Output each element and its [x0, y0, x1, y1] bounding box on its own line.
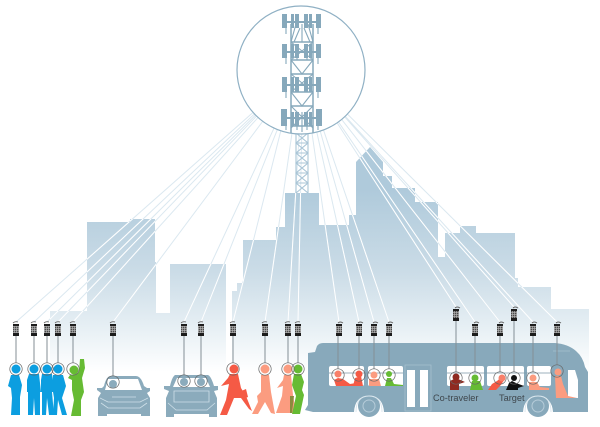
bus windows — [329, 366, 578, 407]
phone icons — [13, 309, 560, 336]
phone signal arcs — [13, 307, 561, 323]
green person waving — [68, 359, 85, 416]
bus door and window rail — [405, 351, 570, 411]
tower magnifier circle — [237, 6, 365, 134]
blue people group — [8, 364, 67, 415]
car 1 front view — [97, 376, 150, 416]
contact rings — [10, 363, 563, 388]
signal lines to tower — [16, 112, 557, 322]
phone top and bottom bars — [13, 310, 560, 334]
antenna panels — [281, 14, 322, 126]
bus wheels — [356, 395, 551, 417]
car 2 rear view — [164, 375, 218, 417]
label: Co-traveler: Co-traveler — [433, 393, 478, 403]
bus passengers — [334, 368, 577, 398]
label: Target: Target — [499, 393, 525, 403]
bus — [305, 343, 588, 417]
tower mast — [286, 24, 318, 133]
lower tower lattice — [296, 133, 308, 193]
phones with links to people — [10, 307, 563, 388]
skyline — [50, 147, 589, 372]
link lines — [16, 321, 557, 376]
walking people — [220, 364, 304, 415]
